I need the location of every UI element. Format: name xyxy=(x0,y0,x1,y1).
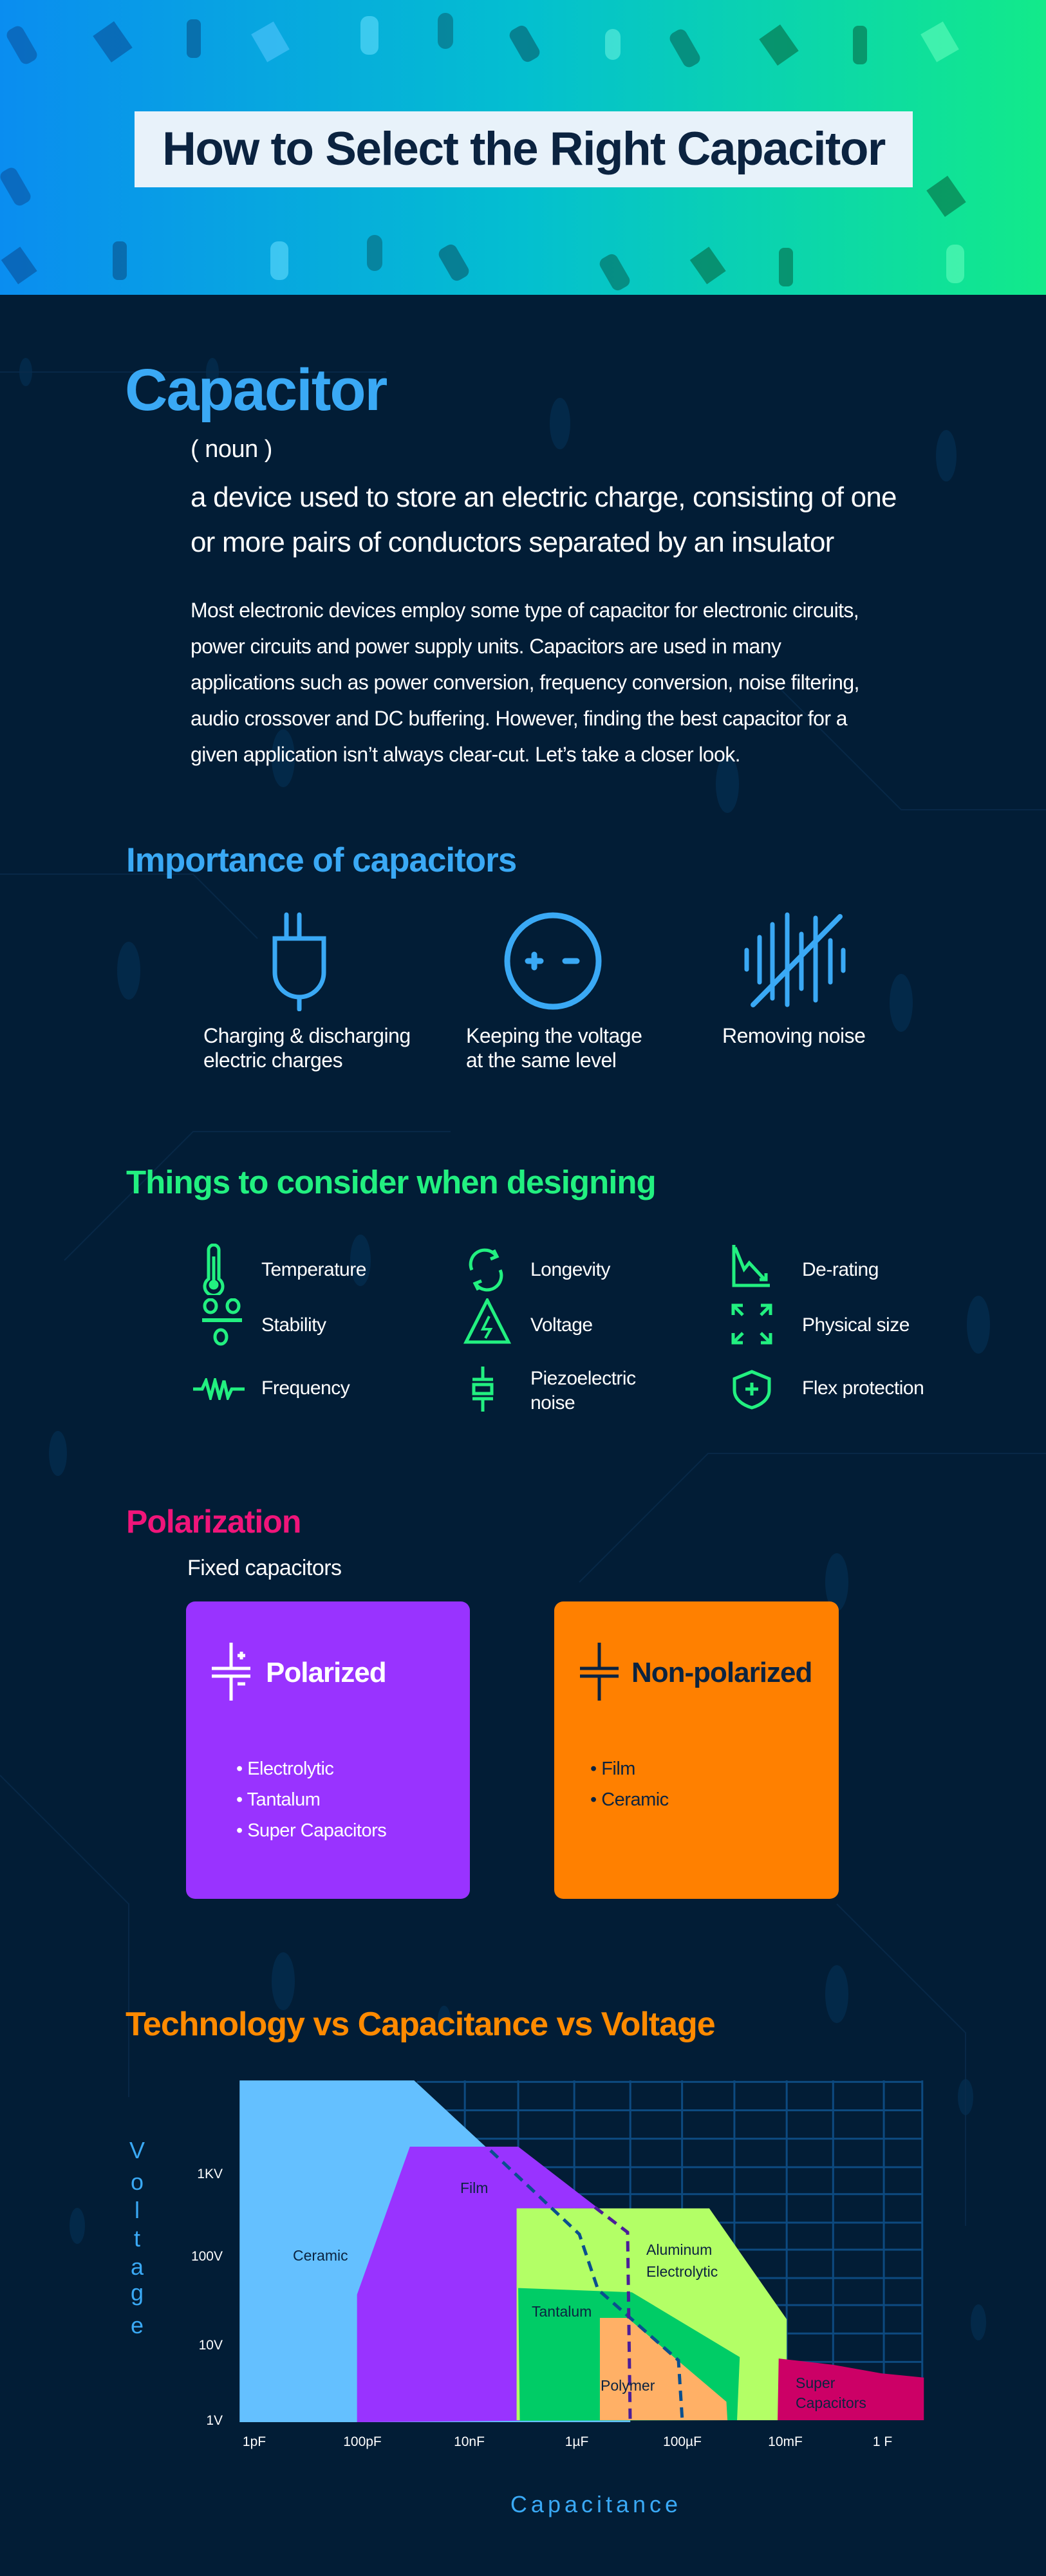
y axis ticks: 1KV xyxy=(197,2167,223,2181)
icon: voltage xyxy=(463,1298,511,1344)
heading: Importance of capacitors: Importance of capacitors xyxy=(126,841,516,879)
label: piezoelectric noise: Piezoelectric xyxy=(530,1368,636,1389)
icon: capacitor symbol xyxy=(580,1643,619,1701)
text: definition: or more pairs of conductors separated by an insulator xyxy=(191,527,834,558)
heading: Technology vs Capacitance vs Voltage: Technology vs Capacitance vs Voltage xyxy=(126,2006,715,2043)
y axis ticks: 100V xyxy=(191,2249,223,2264)
label: piezoelectric noise: noise xyxy=(530,1392,575,1414)
text: noun: ( noun ) xyxy=(191,436,272,463)
icon: piezo xyxy=(472,1367,493,1412)
area labels: Tantalum xyxy=(532,2303,592,2320)
label: voltage: Voltage xyxy=(530,1314,593,1336)
y axis title: t xyxy=(134,2225,140,2252)
icon: plug xyxy=(273,913,326,1011)
y axis title: a xyxy=(131,2254,144,2280)
area labels: Polymer xyxy=(601,2377,655,2394)
heading: Capacitor: Capacitor xyxy=(125,357,386,423)
title xyxy=(135,111,913,187)
text: intro paragraph: applications such as power conversion, frequency conversion, noise filtering, xyxy=(191,671,859,694)
chart: technology vs capacitance vs voltage xyxy=(129,2080,924,2517)
icon: physical size xyxy=(731,1304,772,1344)
chart grid xyxy=(417,2080,922,2420)
text: intro paragraph: given application isn’t always clear-cut. Let’s take a closer look. xyxy=(191,743,740,766)
label: charging: electric charges xyxy=(203,1049,342,1072)
label: temperature: Temperature xyxy=(261,1259,366,1280)
label: longevity: Longevity xyxy=(530,1259,610,1280)
list: polarized types xyxy=(236,1759,386,1841)
list: non-polarized types: • Film xyxy=(590,1759,635,1779)
header banner xyxy=(0,0,1046,295)
list: non-polarized types: • Ceramic xyxy=(590,1789,669,1810)
icon: noise removed xyxy=(744,913,846,1007)
area labels: Capacitors xyxy=(796,2394,866,2411)
x axis ticks: 10mF xyxy=(768,2434,803,2449)
text: intro paragraph: power circuits and power supply units. Capacitors are used in many xyxy=(191,635,781,658)
label: frequency: Frequency xyxy=(261,1377,350,1399)
x axis ticks xyxy=(243,2434,892,2449)
title: How to Select the Right Capacitor xyxy=(162,123,885,175)
label: charging: Charging & discharging xyxy=(203,1024,411,1047)
area labels: Electrolytic xyxy=(646,2263,718,2280)
label: keeping voltage: Keeping the voltage xyxy=(466,1024,642,1047)
area labels: Super xyxy=(796,2375,836,2391)
y axis title: l xyxy=(135,2197,140,2223)
label: physical size: Physical size xyxy=(802,1314,910,1336)
x axis ticks: 1µF xyxy=(565,2434,588,2449)
heading: Polarization: Polarization xyxy=(126,1504,301,1540)
label: keeping voltage xyxy=(466,1024,642,1072)
icon: shield xyxy=(733,1370,771,1410)
y axis title: V xyxy=(129,2137,145,2163)
panel: polarized card xyxy=(186,1601,470,1899)
y axis title: g xyxy=(131,2279,144,2306)
icon: polarized capacitor symbol xyxy=(212,1643,250,1701)
icon: thermometer xyxy=(203,1244,224,1295)
label: de-rating: De-rating xyxy=(802,1259,879,1280)
text: intro paragraph: Most electronic devices employ some type of capacitor for electronic circuits, xyxy=(191,599,859,622)
label: piezoelectric noise xyxy=(530,1368,636,1414)
panel: non-polarized card xyxy=(554,1601,839,1899)
text: intro paragraph: audio crossover and DC buffering. However, finding the best capacitor for a xyxy=(191,707,847,730)
icon: stability xyxy=(202,1298,242,1345)
area labels: Film xyxy=(460,2179,488,2196)
x axis ticks: 1 F xyxy=(873,2434,892,2449)
label: polarized: Polarized xyxy=(266,1657,386,1688)
icon: frequency xyxy=(193,1378,245,1400)
text: fixed capacitors: Fixed capacitors xyxy=(187,1556,342,1580)
y axis ticks xyxy=(191,2167,223,2428)
list: polarized types: • Super Capacitors xyxy=(236,1820,386,1841)
list: non-polarized types xyxy=(590,1759,669,1810)
panel: considerations grid xyxy=(193,1244,924,1414)
list: polarized types: • Electrolytic xyxy=(236,1759,333,1779)
y axis ticks: 10V xyxy=(199,2338,223,2353)
text: definition: a device used to store an electric charge, consisting of one xyxy=(191,481,897,513)
text: definition xyxy=(191,481,897,558)
panel: importance items xyxy=(203,913,865,1072)
x axis ticks: 10nF xyxy=(454,2434,485,2449)
heading: Things to consider: Things to consider when designing xyxy=(126,1164,656,1200)
chart areas xyxy=(239,2080,924,2422)
icon: longevity xyxy=(469,1249,503,1291)
x axis ticks: 100pF xyxy=(343,2434,382,2449)
x axis ticks: 100µF xyxy=(663,2434,702,2449)
x axis title: Capacitance xyxy=(510,2491,682,2517)
text: intro paragraph xyxy=(191,599,859,766)
label: stability: Stability xyxy=(261,1314,326,1336)
label: flex protection: Flex protection xyxy=(802,1377,924,1399)
dashed boundary lines xyxy=(490,2151,682,2421)
icon: plus minus circle xyxy=(505,913,601,1009)
label: charging xyxy=(203,1024,411,1072)
label: non-polarized: Non-polarized xyxy=(631,1657,812,1688)
area labels xyxy=(293,2179,866,2411)
label: keeping voltage: at the same level xyxy=(466,1049,616,1072)
y axis title: o xyxy=(131,2169,144,2195)
icon: de-rating xyxy=(733,1245,770,1287)
header capacitor pattern xyxy=(0,13,966,291)
x axis ticks: 1pF xyxy=(243,2434,266,2449)
y axis title: e xyxy=(131,2312,144,2338)
y axis title xyxy=(129,2137,145,2338)
area labels: Ceramic xyxy=(293,2247,348,2264)
area labels: Aluminum xyxy=(646,2241,712,2258)
y axis ticks: 1V xyxy=(206,2413,223,2428)
list: polarized types: • Tantalum xyxy=(236,1789,320,1810)
label: removing noise: Removing noise xyxy=(722,1024,865,1047)
